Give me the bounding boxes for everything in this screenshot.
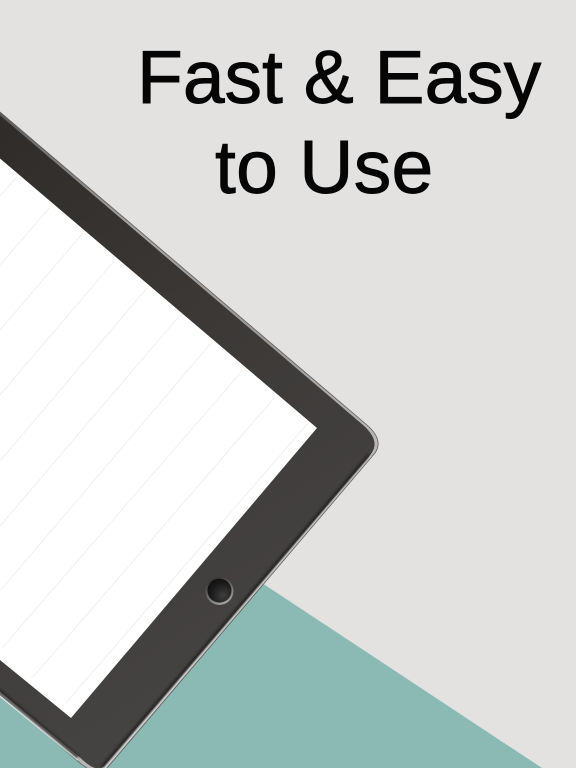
heading line 1: Fast & Easy bbox=[137, 35, 542, 119]
tablet bezel bbox=[0, 107, 375, 768]
bezel edge shadow bbox=[0, 455, 369, 767]
tablet device bbox=[0, 104, 378, 768]
home button bbox=[206, 577, 234, 605]
heading line 2: to Use bbox=[215, 125, 434, 209]
tablet metal rim bbox=[0, 104, 378, 768]
screen ruled lines bbox=[0, 177, 308, 703]
tablet screen bbox=[0, 158, 317, 718]
heading bbox=[137, 35, 542, 209]
bright rim highlight on lower edges bbox=[0, 456, 371, 768]
teal background shape bbox=[0, 583, 542, 768]
